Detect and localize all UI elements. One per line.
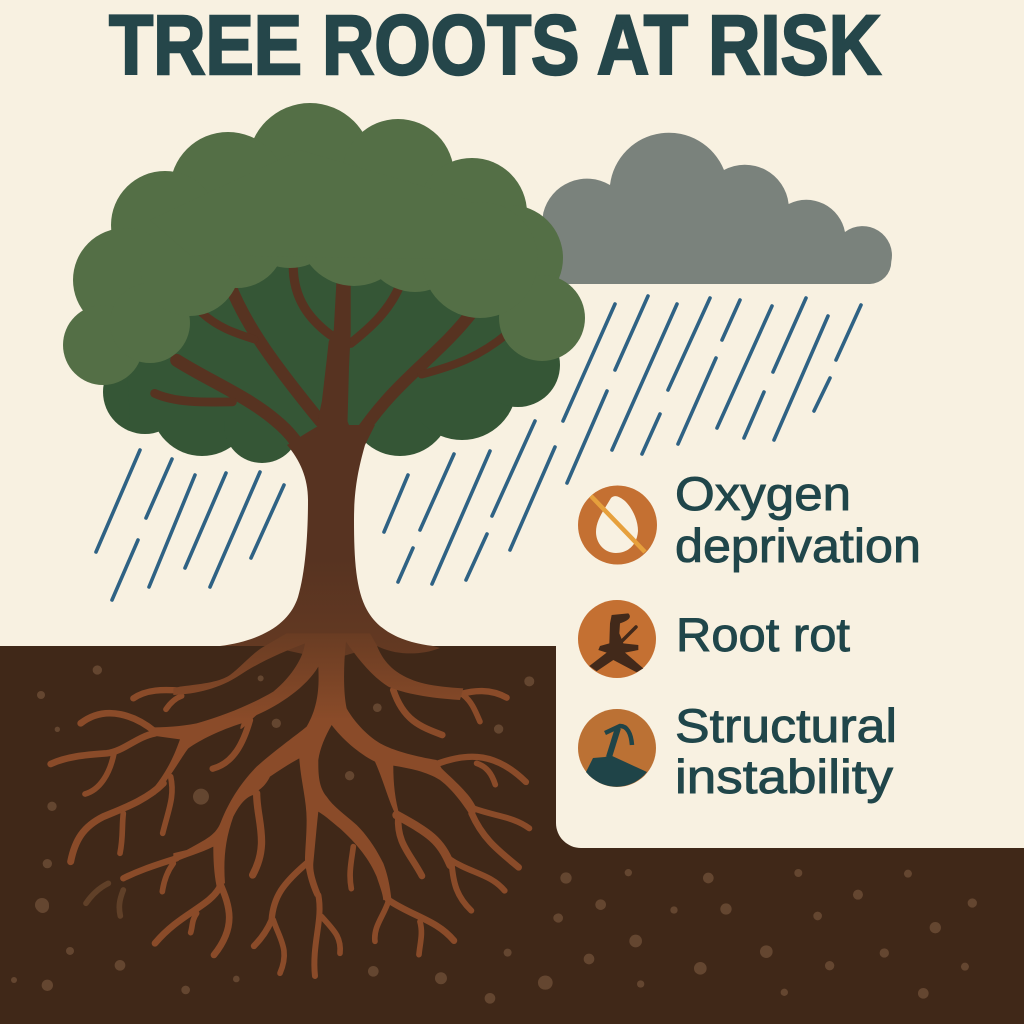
soil ground xyxy=(0,646,1024,1024)
label: structural instability xyxy=(675,699,897,803)
soil specks xyxy=(11,665,977,1004)
icon: no water drop xyxy=(578,486,657,564)
icon: toppling tree on slope xyxy=(578,709,656,787)
dark canopy xyxy=(103,250,560,463)
rain: falling streaks xyxy=(96,296,861,600)
light canopy xyxy=(63,103,585,385)
main root mass xyxy=(148,633,477,902)
label: structural instability: instability xyxy=(675,750,894,803)
label: oxygen deprivation: Oxygen xyxy=(675,467,851,520)
branches xyxy=(155,266,508,465)
label: oxygen deprivation: deprivation xyxy=(675,519,921,572)
storm cloud xyxy=(533,133,892,284)
icon: rotted root xyxy=(578,600,656,678)
fine root tips xyxy=(51,690,529,976)
label: root rot: Root rot xyxy=(676,608,850,661)
faded root tip xyxy=(86,883,123,916)
tree roots xyxy=(51,633,529,976)
trunk xyxy=(220,420,440,660)
title: TREE ROOTS AT RISK xyxy=(109,0,881,92)
label: oxygen deprivation xyxy=(675,467,921,572)
label: structural instability: Structural xyxy=(675,699,897,752)
